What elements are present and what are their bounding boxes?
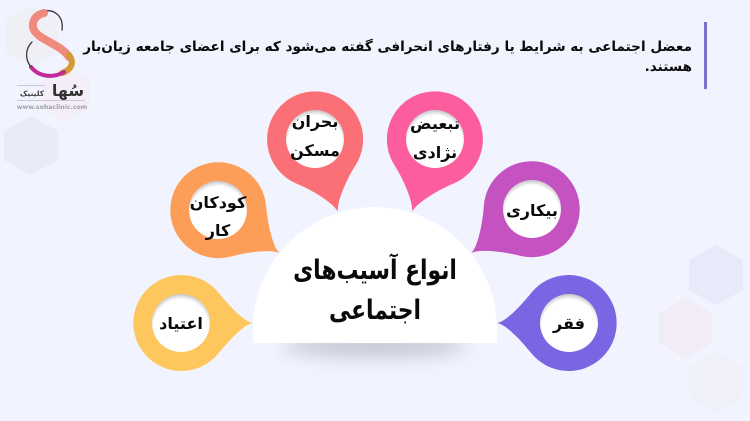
pin: housing crisis: مسکن [290,141,340,160]
description text: معضل اجتماعی به شرایط یا رفتارهای انحرافی گفته می‌شود که برای اعضای جامعه زیان‌بار [82,38,692,55]
center dome [253,207,497,343]
pin: addiction [133,275,253,371]
center title: اجتماعی [329,294,421,326]
pin: child labor: کار [205,221,231,240]
center title [293,253,457,326]
pin: housing crisis: بحران [292,112,338,131]
pin: racial discrimination: نژادی [413,143,457,162]
accent bar [704,22,707,89]
description text: هستند. [645,59,692,75]
dome shadow [283,335,467,357]
pin: unemployment [443,142,599,292]
pin: child labor: کودکان [190,193,247,212]
pin: racial discrimination [366,79,495,226]
pin: poverty: فقر [552,314,585,333]
center title: انواع آسیب‌های [293,253,457,286]
decorative hexagons right [659,245,743,412]
description text [82,38,692,75]
pin: addiction: اعتیاد [159,314,203,333]
logo wordmark: سُها [52,81,84,100]
decorative hexagons left [4,6,90,175]
pin: housing crisis [255,79,384,226]
logo url: www.sohaclinic.com [17,104,87,111]
pin: child labor [151,143,307,292]
logo [17,11,87,111]
pin: unemployment: بیکاری [506,201,558,220]
pin: poverty [497,275,617,371]
logo rules [17,86,85,100]
logo S mark [27,11,72,76]
logo subtitle: کلینیک [20,89,45,98]
pin: racial discrimination: تبعیض [410,114,460,133]
